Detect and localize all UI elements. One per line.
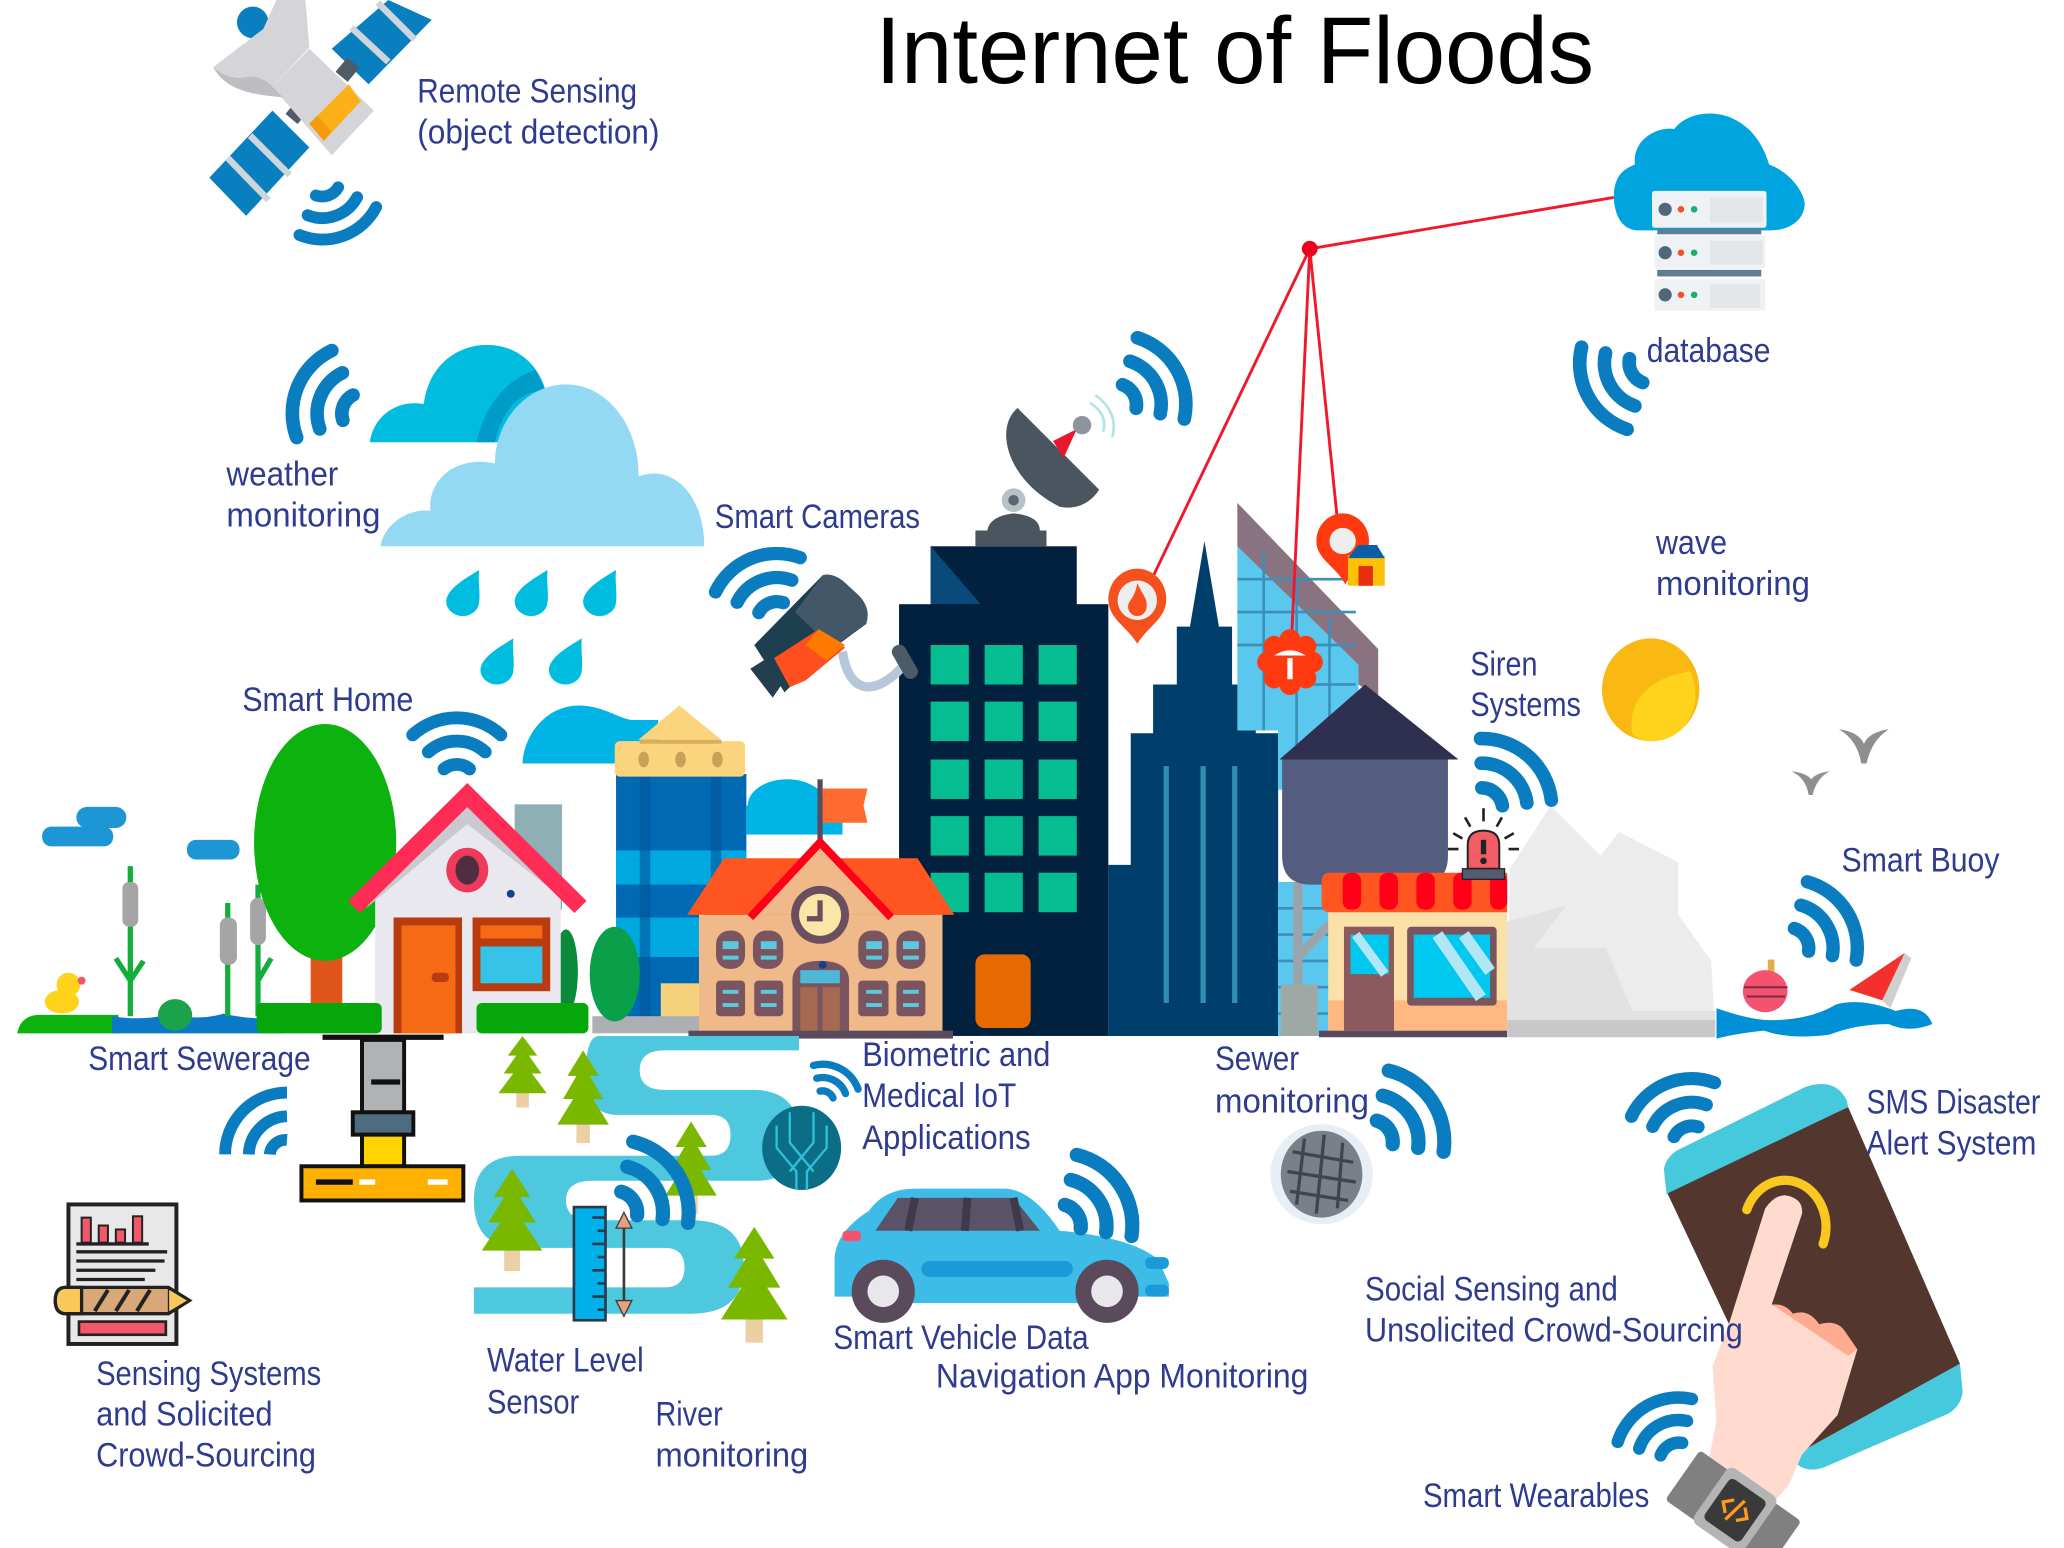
label: biometric and medical: Applications [862,1119,1031,1157]
label: water level sensor: Sensor [487,1384,579,1422]
icon: fire pin [1108,569,1166,644]
label: river monitoring: monitoring [656,1436,808,1474]
icon: database cloud [1614,113,1805,311]
label: biometric and medical: Medical IoT [862,1077,1016,1115]
icon: satellite [209,0,432,216]
icon: sea, buoy and boat [1716,953,1932,1039]
icon: small green tree [590,927,640,1021]
label: smart sewerage: Smart Sewerage [88,1040,311,1078]
wetland scene [17,866,283,1033]
label: smart cameras: Smart Cameras [715,498,920,536]
icon: circuit chip [762,1106,841,1190]
label: water level sensor [487,1342,644,1422]
icon: rain cloud [380,384,704,546]
icon: tree [254,724,396,1007]
icon: river wifi [602,1131,704,1244]
label: remote sensing: Remote Sensing [417,73,637,111]
label: siren systems [1470,645,1581,724]
label: sewer monitoring: Sewer [1215,1040,1299,1078]
label: weather monitoring: weather [225,456,338,494]
label: biometric and medical: Biometric and [862,1036,1050,1074]
label: water level sensor: Water Level [487,1342,644,1380]
icon: siren wifi [1457,725,1563,828]
icon: security camera [750,575,920,698]
icon: camera wifi [709,541,813,625]
icon: home wifi [413,718,501,769]
label: social sensing: Social Sensing and [1365,1271,1618,1309]
label: sensing systems: Sensing Systems [96,1355,321,1393]
label: remote sensing [417,73,659,151]
icon: document with pencil [55,1204,190,1344]
label: wave monitoring [1655,524,1810,603]
icon: hand [1691,1195,1857,1514]
label: weather monitoring: monitoring [226,497,380,535]
icon: sun [1602,638,1699,741]
icon: medical star [1257,629,1323,695]
icon: blue silo tower [615,706,746,1019]
icon: sewer wifi [1357,1060,1459,1173]
label: sensing systems: Crowd-Sourcing [96,1436,316,1474]
icon: satellite wifi [289,177,382,250]
icon: small blue cloud [523,706,658,763]
label: wave monitoring: monitoring [1656,565,1810,603]
label: river monitoring: River [656,1396,723,1434]
icon: location pin with house [1316,513,1385,586]
icon: chip wifi [804,1057,863,1106]
icon: back cloud [370,345,545,442]
label: siren systems: Siren [1470,645,1537,683]
icon: birds [1792,729,1889,795]
label: navigation app monitoring: Navigation App Monitoring [936,1357,1308,1395]
label: smart wearables: Smart Wearables [1423,1477,1649,1515]
icon: red connection lines [1152,197,1614,645]
icon: shop [1319,873,1507,1037]
label: social sensing [1365,1271,1743,1349]
icon: car wifi [1045,1144,1147,1257]
icon: water level ruler [574,1207,632,1320]
icon: pine trees [482,1036,788,1343]
icon: smart watch [1664,1446,1804,1548]
icon: sewer pipe device [301,1037,463,1200]
icon: rain drops [446,570,616,684]
icon: river [474,1036,799,1314]
label: database: database [1647,332,1770,370]
icon: water tower [1279,684,1458,1036]
icon: car [835,1189,1169,1323]
icon: manhole [1270,1124,1373,1224]
icon: school [687,779,954,1039]
icon: smart home house [257,795,588,1033]
label: remote sensing: (object detection) [417,113,659,151]
icon: buoy wifi [1777,872,1871,979]
label: sensing systems [96,1355,321,1474]
label: smart vehicle data: Smart Vehicle Data [833,1319,1089,1357]
label: sewer monitoring [1215,1040,1369,1120]
label: wave monitoring: wave [1655,524,1727,562]
icon: glass building [1237,503,1378,1036]
label: sewer monitoring: monitoring [1215,1082,1369,1120]
label: siren systems: Systems [1470,686,1581,724]
label: smart buoy: Smart Buoy [1842,841,2000,879]
icon: wearable wifi [1609,1385,1709,1471]
title: Internet of Floods [875,0,1594,104]
icon: smartphone [1664,1084,1963,1470]
icon: sewerage wifi [225,1093,287,1154]
icon: dish wifi [1106,329,1200,437]
label: river monitoring [656,1396,808,1474]
icon: left clouds [42,807,240,860]
icon: database wifi [1566,330,1659,438]
ground strip [592,1016,704,1033]
label: biometric and medical [862,1036,1050,1157]
icon: weather wifi [280,344,366,451]
icon: duck [45,973,86,1014]
icon: spire skyscraper [1108,541,1278,1036]
label: weather monitoring [225,456,380,535]
icon: back cloud shade [477,370,545,442]
label: sensing systems: and Solicited [96,1396,272,1434]
label: social sensing: Unsolicited Crowd-Sourcing [1365,1311,1743,1349]
icon: snowy mountain [1507,806,1715,1037]
label: sms disaster alert system [1867,1084,2040,1162]
icon: tall dark building [899,546,1108,1036]
label: sms disaster alert system: Alert System [1867,1124,2036,1162]
label: smart home: Smart Home [242,681,413,719]
icon: satellite dish antenna [975,395,1114,546]
icon: siren [1448,808,1519,879]
icon: phone wifi [1625,1067,1728,1149]
